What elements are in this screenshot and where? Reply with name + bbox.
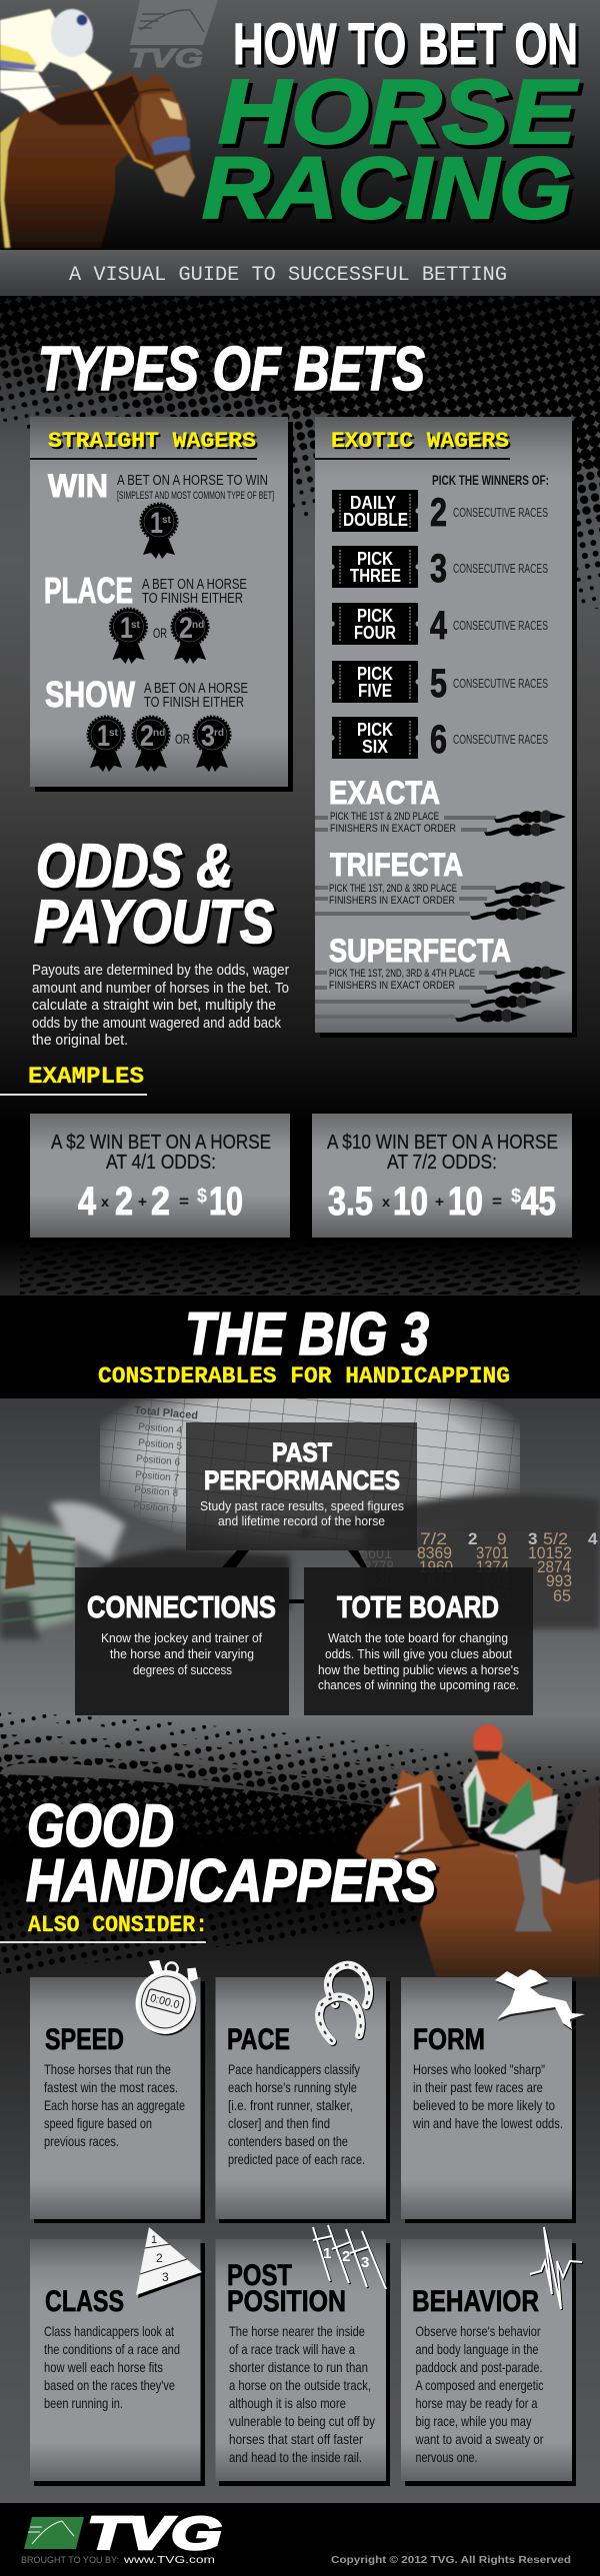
card: behavior: BEHAVIOR [412,2285,539,2318]
icon: stopwatch [130,1955,206,2042]
ticket row: pick three: PICK [357,549,393,569]
equation: x [101,1194,109,1210]
equation [328,1180,556,1224]
card: post position [216,2239,390,2486]
section: handicappers background [0,1712,600,2503]
big 3 connectors [222,1550,367,1603]
win bet: WIN [48,468,108,504]
ticket row: pick four: CONSECUTIVE RACES [453,619,548,633]
example: $10 win bet: AT 7/2 ODDS: [387,1152,497,1174]
icon: first place ribbon: st [162,515,172,526]
example: $2 win bet [30,1114,294,1242]
icon: show ribbons [88,716,230,772]
title: racing: RACING [202,140,572,237]
heading: odds and payouts [34,832,274,956]
photo: tote board: 8369 [417,1543,452,1562]
text: odds explanation: calculate a straight win bet, multiply the [32,997,276,1014]
ticket row: pick three: 3 [430,547,447,591]
heading: good handicappers: GOOD [27,1792,174,1859]
superfecta: SUPERFECTA [329,933,511,969]
icon: class pyramid: 1 [151,2234,157,2246]
card: behavior: want to avoid a sweaty or [415,2431,544,2447]
photo: jockey on brown horse [0,9,195,248]
heading: straight wagers: STRAIGHT WAGERS [48,429,256,454]
equation: 10 [209,1180,243,1224]
equation: x [382,1194,390,1210]
panel: past performances: and lifetime record of the horse [218,1513,385,1528]
heading: odds and payouts: PAYOUTS [34,888,274,956]
win bet [48,468,274,504]
icon: class pyramid [136,2227,204,2298]
place bet [44,570,247,611]
card: behavior: A composed and energetic [416,2377,544,2393]
card: behavior: nervous one. [416,2449,478,2465]
card: pace: Pace handicappers classify [228,2061,360,2077]
card: post position: POST [227,2259,292,2292]
ticket row: pick six: 6 [430,718,447,762]
card: behavior: big race, while you may [416,2413,532,2429]
icon: show ribbons: rd [214,728,224,739]
ticket row: daily double: CONSECUTIVE RACES [453,506,548,520]
card: class: CLASS [45,2285,124,2318]
card: post position: although it is also more [229,2395,346,2411]
heading: types of bets: TYPES OF BETS [38,335,425,404]
card: class [30,2239,205,2486]
icon: heartbeat line [530,2227,583,2310]
card: form: FORM [413,2023,485,2056]
text: odds explanation [32,962,289,1049]
card: class: been running in. [44,2395,123,2411]
place bet: A BET ON A HORSE [142,576,247,593]
icon: starting gate posts: 1 [323,2245,331,2262]
text: odds explanation: Payouts are determined by the odds, wager [32,962,289,979]
ticket row: pick three [329,546,548,591]
text: odds explanation: odds by the amount wagered and add back [32,1015,281,1032]
photo: tote board: 10152 [528,1543,572,1562]
photo: tote board: 45601 [352,1543,392,1562]
equation: 2 [151,1180,170,1224]
ticket row: pick five: FIVE [358,681,392,701]
icon: TVG watermark logo [128,0,218,73]
panel: past performances [186,1422,417,1550]
photo: tote board: 163 [484,1586,510,1605]
superfecta: PICK THE 1ST, 2ND, 3RD & 4TH PLACE [329,968,475,980]
spreadsheet photo [100,1398,520,1541]
icon: class pyramid: 3 [162,2270,169,2284]
photo: tote board [300,1494,600,1629]
ticket row: daily double: 2 [430,491,447,535]
panel: tote board: odds. This will give you clues about [325,1646,512,1661]
card: post position: of a race track will have a [229,2341,355,2357]
icon: first place ribbon [140,504,178,559]
logo: TVG: TVG [87,2507,222,2559]
photo: tote board: 2874 [537,1557,571,1576]
photo: tote board: 993 [546,1571,572,1590]
equation: $ [511,1186,521,1208]
superfecta [315,933,566,1022]
ticket row: pick six: PICK [357,720,393,740]
example: $2 win bet: AT 4/1 ODDS: [106,1152,216,1174]
trifecta [315,847,566,920]
card: behavior [401,2239,576,2486]
label: pick the winners of: PICK THE WINNERS OF: [432,472,549,488]
example: $10 win bet [312,1114,576,1242]
card: pace: contenders based on the [228,2133,348,2149]
card: class: the conditions of a race and [44,2341,180,2357]
card: speed [30,1977,205,2223]
icon: horseshoes [319,1965,370,2042]
icon: place ribbons: 2 [179,612,193,645]
superfecta: FINISHERS IN EXACT ORDER [329,980,455,992]
equation: + [138,1194,147,1211]
card: behavior: horse may be ready for a [416,2395,538,2411]
card: form: believed to be more likely to [413,2097,555,2113]
equation: 2 [115,1180,133,1224]
photo: tote board: 9 [497,1529,506,1548]
equation: 10 [448,1180,483,1224]
equation: 4 [78,1180,97,1224]
text: odds explanation: amount and number of horses in the bet. To [32,980,289,997]
card: form: Horses who looked "sharp" [413,2061,545,2077]
equation: 45 [521,1180,556,1224]
card: behavior: paddock and post-parade. [416,2359,542,2375]
photo: tote board: 1960 [419,1557,453,1576]
panel: connections: the horse and their varying [110,1646,254,1661]
ticket row: pick five: PICK [357,664,393,684]
panel: tote board [304,1567,533,1715]
panel: exotic wagers [315,417,577,1038]
panel: tote board: chances of winning the upcoming race. [318,1677,519,1692]
photo: tote board: 65 [553,1586,571,1605]
card: post position: and head to the inside rail. [229,2449,362,2465]
panel: tote board: TOTE BOARD [337,1589,499,1624]
ticket row: daily double [329,490,548,535]
icon: show ribbons: OR [175,731,190,747]
section: the big 3 banner: THE BIG 3 [185,1300,429,1367]
ticket row: daily double: DAILY [350,493,396,513]
card: post position: The horse nearer the inside [229,2323,365,2339]
subtitle band [0,250,600,296]
card: speed: SPEED [45,2023,124,2056]
ticket row: pick three: THREE [350,566,401,586]
ticket row: pick four: FOUR [354,623,396,643]
show bet: SHOW [45,674,135,715]
card: pace: PACE [227,2023,290,2056]
brought to you by: BROUGHT TO YOU BY: [21,2555,119,2565]
title: horse: HORSE [218,62,579,163]
win bet: A BET ON A HORSE TO WIN [117,472,268,489]
panel: tote board: Watch the tote board for changing [328,1630,508,1645]
equation [78,1180,243,1224]
icon: place ribbons: 1 [120,612,133,645]
photo: jockey on chestnut horse [356,1724,600,1977]
spreadsheet photo: Position 9 [133,1500,178,1515]
trifecta: PICK THE 1ST, 2ND & 3RD PLACE [329,883,457,895]
heading: good handicappers [26,1792,436,1914]
trifecta: FINISHERS IN EXACT ORDER [329,895,455,907]
equation: = [492,1194,502,1211]
section: the big 3 banner [0,1295,600,1398]
footer [0,2503,600,2576]
icon: place ribbons: OR [153,625,167,641]
icon: show ribbons: st [109,728,119,739]
icon: starting gate posts [313,2225,387,2290]
icon: starting gate posts: 3 [361,2254,369,2271]
photo: tote board: 879 [427,1571,453,1590]
spreadsheet photo: Position 4 [138,1421,183,1436]
spreadsheet photo: Position 8 [134,1484,179,1499]
card: speed: Each horse has an aggregate [44,2097,185,2113]
spreadsheet photo: Total Placed [134,1404,199,1422]
example: $10 win bet: A $10 WIN BET ON A HORSE [327,1132,558,1154]
subtitle band: A VISUAL GUIDE TO SUCCESSFUL BETTING [69,264,507,287]
icon: show ribbons: 3 [201,720,215,753]
card: pace: [i.e. front runner, stalker, [228,2097,353,2113]
photo: tote board: 666 [484,1571,510,1590]
ticket row: pick five [329,661,548,706]
icon: show ribbons: 1 [97,720,110,753]
tire track texture [20,1243,580,1294]
ticket row: pick six [329,717,548,762]
ticket row: pick four [329,603,548,648]
icon: galloping horse and jockey [495,1969,585,2029]
card: pace: each horse's running style [228,2079,357,2095]
photo: tote board: 2 [468,1529,477,1548]
section: big 3 background photo collage [0,1398,600,1718]
card: post position: vulnerable to being cut off by [229,2413,375,2429]
ticket row: pick four: PICK [357,606,393,626]
card: speed: fastest win the most races. [44,2079,178,2095]
section: the big 3 banner: CONSIDERABLES FOR HANDICAPPING [98,1363,510,1389]
card: post position: shorter distance to run than [229,2359,368,2375]
ticket row: pick four: 4 [430,604,448,648]
icon: show ribbons: 2 [140,720,154,753]
show bet: TO FINISH EITHER [144,694,244,711]
card: speed: speed figure based on [44,2115,152,2131]
photo: tote board: 5920 [360,1571,393,1590]
text: odds explanation: the original bet. [32,1032,128,1049]
card: class: Class handicappers look at [44,2323,174,2339]
card: behavior: Observe horse's behavior [416,2323,541,2339]
heading: odds and payouts: ODDS & [36,832,233,900]
card: form [401,1977,576,2223]
equation: = [179,1194,189,1211]
icon: show ribbons: nd [153,728,165,739]
photo: jockey at the rail [0,1501,290,1639]
photo: rail stripes [0,1529,75,1621]
card: post position: POSITION [227,2285,346,2318]
ticket row: pick six: CONSECUTIVE RACES [453,733,548,747]
icon: place ribbons: st [131,620,141,631]
halftone texture top [0,296,600,610]
photo: tote board: 13778 [356,1557,394,1576]
card: pace: predicted pace of each race. [228,2151,365,2167]
ticket row: pick six: SIX [362,737,388,757]
spreadsheet photo: Position 5 [138,1437,183,1452]
panel: connections [75,1567,289,1715]
photo: tote board: 5/2 [543,1529,568,1548]
card: post position: horses that start off faster [229,2431,363,2447]
photo: tote board: 3701 [476,1543,509,1562]
card: class: how well each horse fits [44,2359,163,2375]
panel: connections: Know the jockey and trainer of [101,1630,262,1645]
icon: starting gate posts: 2 [342,2248,350,2265]
show bet: A BET ON A HORSE [144,680,248,697]
panel: past performances: PERFORMANCES [204,1465,400,1495]
place bet: TO FINISH EITHER [142,590,243,607]
panel: tote board: how the betting public views a horse's [318,1662,519,1677]
ticket row: daily double: DOUBLE [343,510,408,530]
photo: tote board: 4 [588,1529,598,1548]
brought to you by: www.TVG.com [123,2555,215,2566]
win bet: [SIMPLEST AND MOST COMMON TYPE OF BET] [117,490,274,502]
example: $2 win bet: A $2 WIN BET ON A HORSE [51,1132,271,1154]
photo: tote board: 3 [528,1529,537,1548]
heading: also consider: ALSO CONSIDER: [28,1912,208,1938]
ticket row: pick five: CONSECUTIVE RACES [453,677,548,691]
header [0,0,600,250]
card: pace: closer] and then find [228,2115,330,2131]
panel: connections: CONNECTIONS [87,1589,276,1624]
exacta: EXACTA [329,775,440,811]
icon: first place ribbon: 1 [150,507,163,540]
icon: stopwatch: 0:00.0 [149,1992,181,2011]
ticket row: pick five: 5 [430,662,447,706]
icon: place ribbons: nd [192,620,204,631]
panel: connections: degrees of success [133,1662,232,1677]
equation: 3.5 [328,1180,373,1224]
copyright: Copyright © 2012 TVG. All Rights Reserved [331,2555,571,2566]
equation: 10 [393,1180,428,1224]
icon: class pyramid: 2 [156,2251,163,2265]
trifecta: TRIFECTA [330,847,463,883]
photo: tote board: 1374 [476,1557,509,1576]
panel: straight wagers [30,417,293,792]
equation: + [435,1194,444,1211]
card: form: in their past few races are [413,2079,543,2095]
place bet: PLACE [44,570,133,611]
card: speed: previous races. [44,2133,119,2149]
logo: TVG [24,2507,222,2559]
card: post position: a horse on the outside track, [229,2377,371,2393]
card: class: based on the races they've [44,2377,175,2393]
heading: good handicappers: HANDICAPPERS [26,1847,436,1914]
panel: past performances: Study past race results, speed figures [200,1498,404,1513]
equation: $ [197,1186,207,1208]
exacta: FINISHERS IN EXACT ORDER [330,823,456,835]
card: behavior: and body language in the [416,2341,539,2357]
photo: tote board: 7/2 [420,1529,447,1548]
card: pace [216,1977,390,2223]
spreadsheet photo: Position 7 [135,1469,180,1484]
panel: past performances: PAST [272,1437,332,1467]
heading: examples: EXAMPLES [28,1064,144,1090]
icon: TVG watermark logo: TVG [128,43,203,73]
exacta [315,775,566,836]
exacta: PICK THE 1ST & 2ND PLACE [330,811,439,823]
icon: place ribbons [110,608,208,664]
ticket row: pick three: CONSECUTIVE RACES [453,562,548,576]
show bet [45,674,248,715]
card: form: win and have the lowest odds. [412,2115,563,2131]
card: speed: Those horses that run the [44,2061,171,2077]
spreadsheet photo: Position 6 [136,1453,181,1468]
heading: exotic wagers: EXOTIC WAGERS [331,429,509,454]
brought to you by [21,2555,215,2566]
